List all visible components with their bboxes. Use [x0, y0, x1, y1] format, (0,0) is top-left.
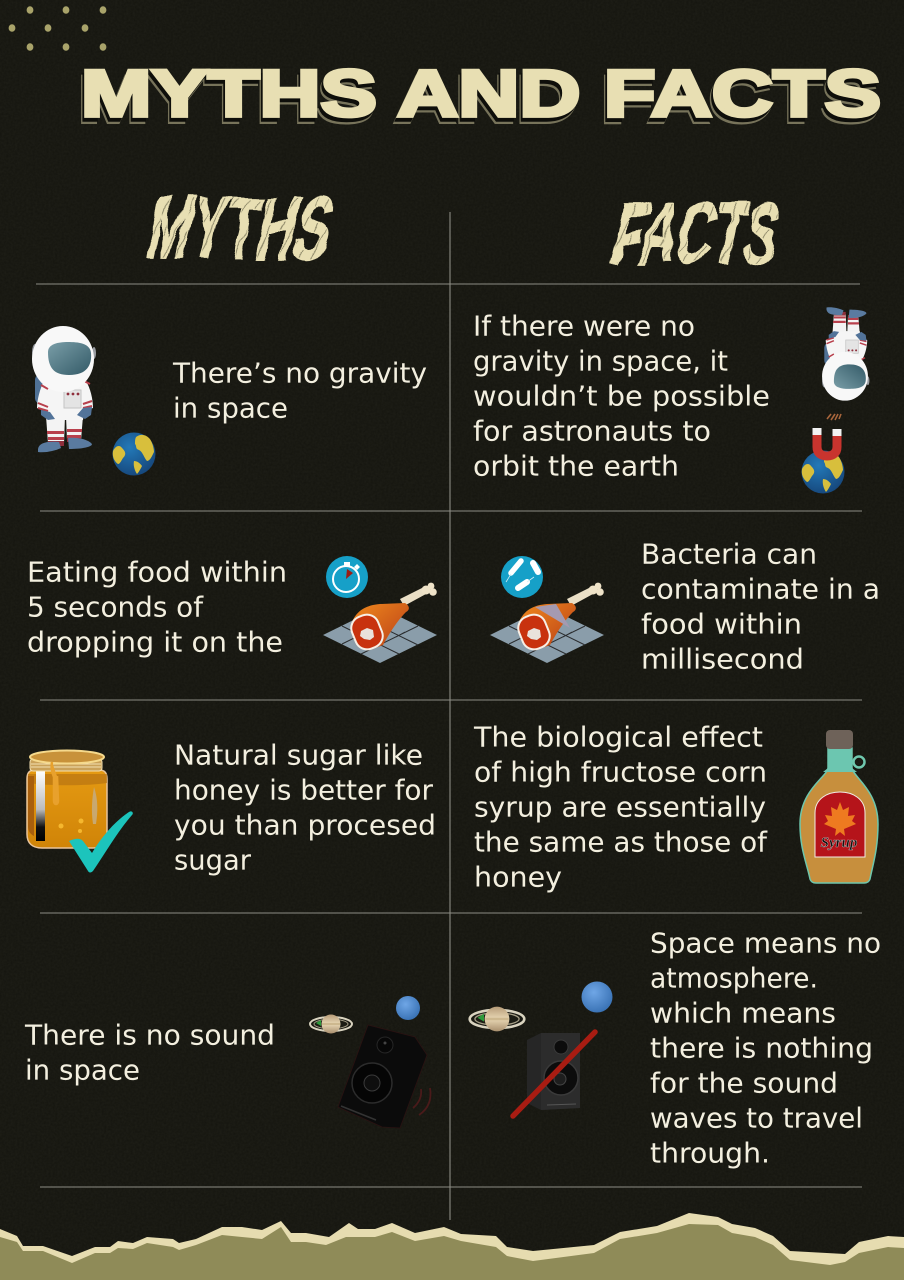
- row 4 myth text: There is no sound: [24, 1020, 275, 1052]
- row 3 fact: syrup bottle icon: [800, 730, 878, 883]
- row 1 fact text: for astronauts to: [473, 416, 711, 448]
- row 1 myth text: in space: [173, 393, 288, 425]
- row 2 fact text: Bacteria can: [641, 539, 817, 571]
- row 1 fact: earth icon: [802, 450, 844, 494]
- row 4 myth text: in space: [25, 1055, 140, 1087]
- row 4 myth: saturn icon: [310, 1014, 352, 1034]
- row 1 fact text: wouldn’t be possible: [473, 381, 770, 413]
- row 3 fact text: [473, 722, 768, 894]
- torn paper footer: [0, 1213, 904, 1280]
- row 3 fact text: syrup are essentially: [474, 792, 766, 824]
- row 2 fact: bacteria icon: [501, 556, 543, 598]
- row 1 myth text: There’s no gravity: [172, 358, 427, 390]
- row 2 myth text: 5 seconds of: [27, 592, 204, 624]
- row 2 fact text: [641, 539, 880, 676]
- row 3 myth: check mark icon: [69, 811, 133, 872]
- row 1 fact text: [473, 311, 770, 483]
- row 2 fact text: food within: [641, 609, 802, 641]
- row 4 fact text: waves to travel: [650, 1103, 863, 1135]
- row 2 fact text: millisecond: [641, 644, 804, 676]
- title: MYTHS AND FACTS: [78, 62, 878, 136]
- title: MYTHS AND FACTS: [79, 60, 879, 134]
- row 1 fact text: If there were no: [473, 311, 695, 343]
- row 3 fact: syrup bottle icon: Syrup: [821, 835, 858, 851]
- row 4 fact text: [650, 928, 881, 1170]
- row 4 fact text: there is nothing: [650, 1033, 873, 1065]
- row 4 fact: saturn icon: [470, 1007, 524, 1031]
- row 1 myth: earth icon: [112, 432, 156, 476]
- row 2 fact text: contaminate in a: [641, 574, 880, 606]
- decorative dots: [9, 6, 106, 51]
- row 4 myth text: [24, 1020, 275, 1087]
- row 3 fact text: the same as those of: [474, 827, 768, 859]
- row 4 myth: tilted speaker icon: [338, 1025, 431, 1128]
- row 1 fact: upside-down astronaut icon: [822, 307, 869, 401]
- row 4 fact text: for the sound: [650, 1068, 838, 1100]
- row 2 myth: stopwatch icon: [326, 556, 368, 598]
- row 2 myth text: dropping it on the: [27, 627, 283, 659]
- row 3 fact text: of high fructose corn: [474, 757, 767, 789]
- row 4 fact text: atmosphere.: [650, 963, 818, 995]
- row 4 myth: neptune icon: [396, 996, 420, 1020]
- row 1 fact: magnet icon: [812, 414, 842, 456]
- row 3 fact text: honey: [474, 862, 562, 894]
- row 3 myth text: [174, 740, 436, 877]
- row 2 myth: ham on floor icon: [323, 583, 437, 663]
- row 3 myth text: you than procesed: [174, 810, 436, 842]
- row 2 myth text: [27, 557, 287, 659]
- row 4 fact: crossed-out speaker icon: [513, 1032, 595, 1116]
- row 3 myth text: sugar: [174, 845, 252, 877]
- title: MYTHS AND FACTS: [81, 56, 881, 130]
- row 4 fact text: Space means no: [650, 928, 881, 960]
- heading: myths: MYTHS: [139, 178, 342, 277]
- row 3 myth: honey jar icon: [27, 750, 107, 848]
- row 3 myth text: honey is better for: [174, 775, 434, 807]
- row 1 myth text: [172, 358, 427, 425]
- row 4 fact text: which means: [650, 998, 836, 1030]
- row 2 fact: contaminated ham icon: [490, 583, 604, 663]
- row 3 myth text: Natural sugar like: [174, 740, 423, 772]
- row 4 fact: neptune icon: [582, 982, 612, 1012]
- row 1 fact text: gravity in space, it: [473, 346, 728, 378]
- row 4 fact text: through.: [650, 1138, 770, 1170]
- row 3 fact text: The biological effect: [473, 722, 763, 754]
- table grid lines: [36, 212, 862, 1220]
- row 2 myth text: Eating food within: [27, 557, 287, 589]
- row 1 fact text: orbit the earth: [473, 451, 679, 483]
- row 1 myth: astronaut icon: [32, 326, 96, 452]
